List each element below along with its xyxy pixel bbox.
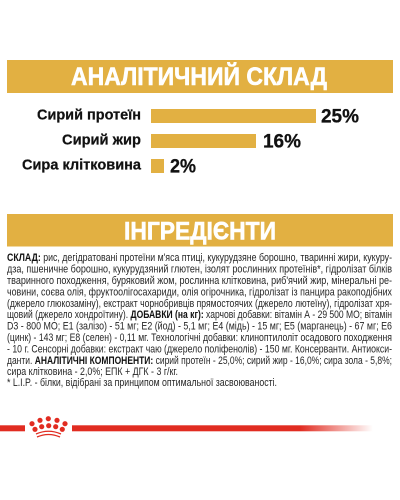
bar row: crude protein 25%: 25%	[321, 107, 359, 128]
panel: ingredients	[7, 214, 393, 389]
heading band: analytical composition: АНАЛІТИЧНИЙ СКЛАД	[71, 61, 327, 91]
text block: ingredient list	[7, 252, 392, 389]
text block: ingredient list: сира клітковина - 2,0%; ЕПК + ДГК - 3 г/кг.	[7, 366, 178, 378]
bar row: crude fat 16%: Сирий жир	[62, 132, 141, 148]
heading band: ingredients	[7, 214, 393, 246]
red line right with fade	[72, 425, 373, 431]
footer: red line with crown logo	[0, 416, 373, 437]
panel: analytical composition	[7, 60, 393, 178]
bar row: crude protein 25%	[37, 106, 359, 128]
text block: ingredient list: * L.I.P. - білки, відібрані за принципом оптимальної засвоюваності.	[7, 377, 277, 389]
bar row: crude fat 16%: 16%	[263, 132, 301, 153]
bar row: crude fibre 2%: 2%	[170, 157, 196, 178]
icon: royal crown logo	[29, 416, 68, 437]
heading band: ingredients: ІНГРЕДІЄНТИ	[124, 218, 276, 246]
bar row: crude fat 16%	[62, 132, 301, 153]
bar row: crude fibre 2%: Сира клітковина	[22, 156, 142, 174]
bar row: crude fibre 2%	[22, 156, 196, 178]
heading band: analytical composition	[7, 60, 393, 93]
bar row: crude protein 25%: Сирий протеїн	[37, 106, 141, 124]
red line left	[0, 425, 25, 431]
